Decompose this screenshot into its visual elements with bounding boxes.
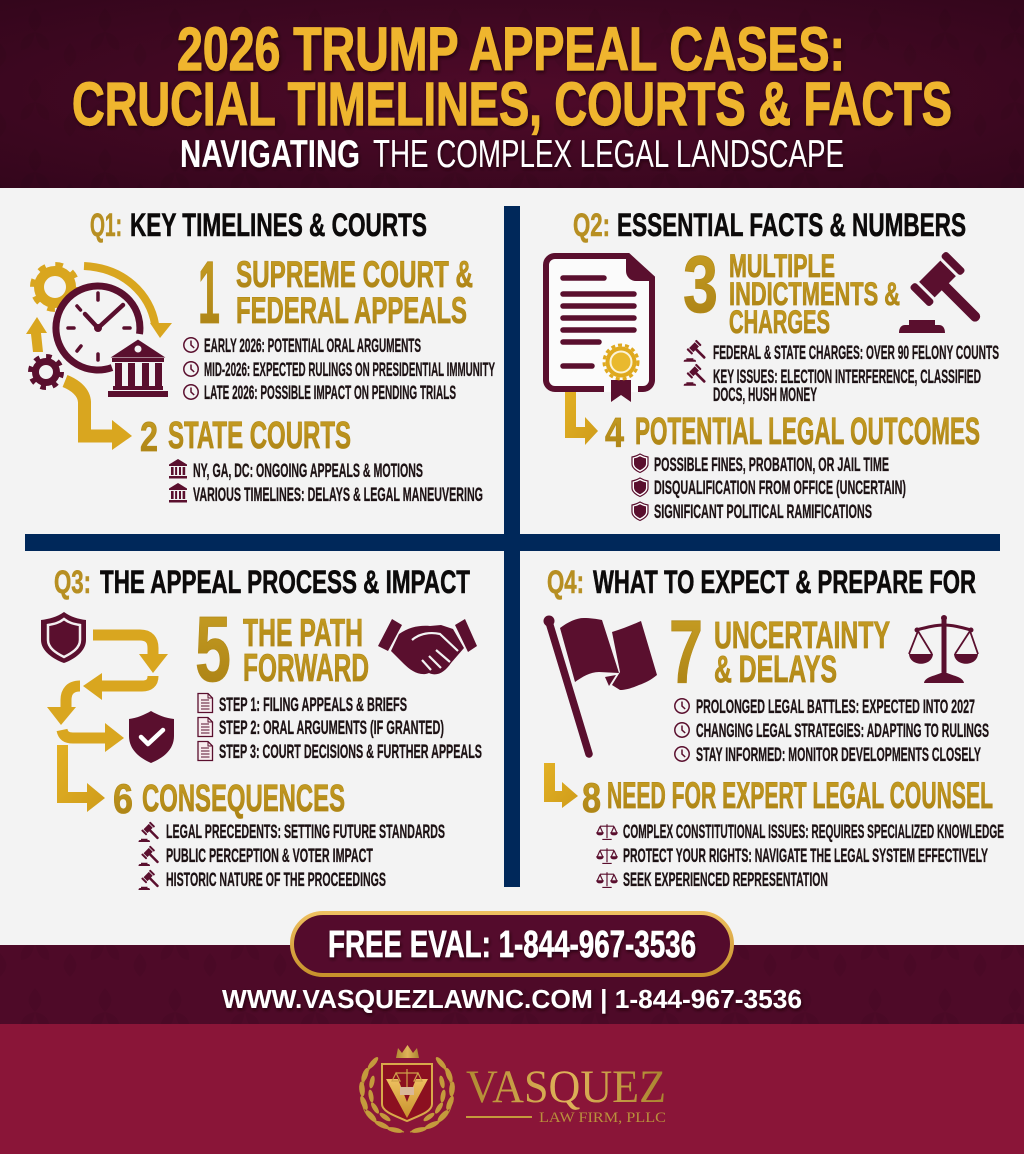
item 2 bullets: NY, GA, DC: ONGOING APPEALS & MOTIONS <box>193 460 423 482</box>
icon: clock, gears and courthouse <box>26 265 172 450</box>
panel: Q4 what to expect and prepare for <box>544 564 1004 891</box>
item 6 bullets: HISTORIC NATURE OF THE PROCEEDINGS <box>166 869 386 891</box>
icon: scales of justice <box>909 615 978 683</box>
item 6 number: 6 <box>113 775 133 822</box>
item 3 bullets <box>684 340 999 406</box>
icon: handshake <box>378 619 477 674</box>
horizontal divider <box>25 534 1000 551</box>
Q1 heading: Q1: <box>90 207 122 243</box>
Q3 heading: Q3: <box>54 564 91 600</box>
item 7 heading <box>714 615 890 691</box>
item 1 bullets: LATE 2026: POSSIBLE IMPACT ON PENDING TRIALS <box>204 382 456 404</box>
contact band <box>0 913 1024 1024</box>
logo band <box>0 1024 1024 1154</box>
logo emblem <box>359 1045 455 1134</box>
icon: flag <box>544 616 657 754</box>
item 5 bullets: STEP 3: COURT DECISIONS & FURTHER APPEALS <box>219 741 482 763</box>
item 1 bullets: MID-2026: EXPECTED RULINGS ON PRESIDENTIAL IMMUNITY <box>204 359 495 381</box>
Q1 heading: KEY TIMELINES & COURTS <box>130 207 427 243</box>
panel: Q2 essential facts and numbers <box>546 207 999 523</box>
item 5 number: 5 <box>195 597 231 701</box>
item 3 heading: INDICTMENTS & <box>729 276 900 312</box>
subtitle <box>180 133 844 176</box>
item 5 bullets <box>198 694 482 763</box>
item 5 heading: FORWARD <box>243 647 369 690</box>
item 6 bullets: LEGAL PRECEDENTS: SETTING FUTURE STANDARDS <box>166 821 445 843</box>
item 3 heading <box>729 248 900 340</box>
Q1 heading <box>90 207 427 243</box>
item 7 number: 7 <box>669 603 703 703</box>
Q4 heading: Q4: <box>547 564 584 600</box>
vertical divider <box>504 206 520 887</box>
item 5 heading: THE PATH <box>243 612 363 655</box>
item 3 heading: CHARGES <box>729 304 830 340</box>
item 1 heading: FEDERAL APPEALS <box>236 290 467 331</box>
Q2 heading: Q2: <box>573 207 610 243</box>
call-to-action pill: FREE EVAL: 1-844-967-3536 <box>328 924 696 966</box>
item 7 heading: UNCERTAINTY <box>714 615 890 657</box>
item 7 bullets <box>675 696 989 766</box>
item 3 heading: MULTIPLE <box>729 248 835 284</box>
panel: Q3 the appeal process and impact <box>41 564 482 891</box>
arrow to item 8 <box>544 763 578 808</box>
panel: Q1 key timelines and courts <box>26 207 495 506</box>
header banner <box>0 0 1024 188</box>
Q3 heading: THE APPEAL PROCESS & IMPACT <box>100 564 470 600</box>
item 1 bullets: EARLY 2026: POTENTIAL ORAL ARGUMENTS <box>204 335 421 357</box>
item 5 heading <box>243 612 369 690</box>
icon: process flow with shields <box>41 612 174 812</box>
item 3 number: 3 <box>683 240 718 330</box>
item 2 bullets <box>169 459 483 506</box>
item 4 bullets <box>632 454 906 523</box>
item 7 heading: & DELAYS <box>714 649 837 691</box>
panel: Q1 key timelines and courts: 1 <box>198 242 220 342</box>
item 2 heading: STATE COURTS <box>168 415 351 457</box>
icon: certificate document <box>546 256 654 445</box>
logo wordmark: VASQUEZ <box>466 1061 666 1113</box>
item 8 bullets: SEEK EXPERIENCED REPRESENTATION <box>623 869 828 891</box>
item 4 number: 4 <box>605 409 625 456</box>
item 6 bullets: PUBLIC PERCEPTION & VOTER IMPACT <box>166 845 373 867</box>
item 5 bullets: STEP 1: FILING APPEALS & BRIEFS <box>219 694 407 716</box>
item 6 bullets <box>138 821 445 891</box>
item 2 bullets: VARIOUS TIMELINES: DELAYS & LEGAL MANEUVERING <box>193 484 483 506</box>
item 3 bullets: DOCS, HUSH MONEY <box>713 384 817 406</box>
item 8 bullets <box>597 821 1004 891</box>
item 8 number: 8 <box>582 774 601 821</box>
item 1 heading <box>236 254 473 331</box>
item 1 heading: SUPREME COURT & <box>236 254 473 295</box>
item 5 bullets: STEP 2: ORAL ARGUMENTS (IF GRANTED) <box>219 717 444 739</box>
icon: gavel <box>899 251 997 338</box>
subtitle: THE COMPLEX LEGAL LANDSCAPE <box>373 133 844 176</box>
call-to-action pill <box>292 913 732 975</box>
Q3 heading <box>54 564 470 600</box>
website and phone: WWW.VASQUEZLAWNC.COM | 1-844-967-3536 <box>222 984 802 1014</box>
logo wordmark: LAW FIRM, PLLC <box>539 1110 666 1126</box>
item 2 number: 2 <box>140 413 158 460</box>
subtitle: NAVIGATING <box>180 133 360 176</box>
item 6 heading: CONSEQUENCES <box>142 778 345 820</box>
item 1 bullets <box>184 335 495 404</box>
